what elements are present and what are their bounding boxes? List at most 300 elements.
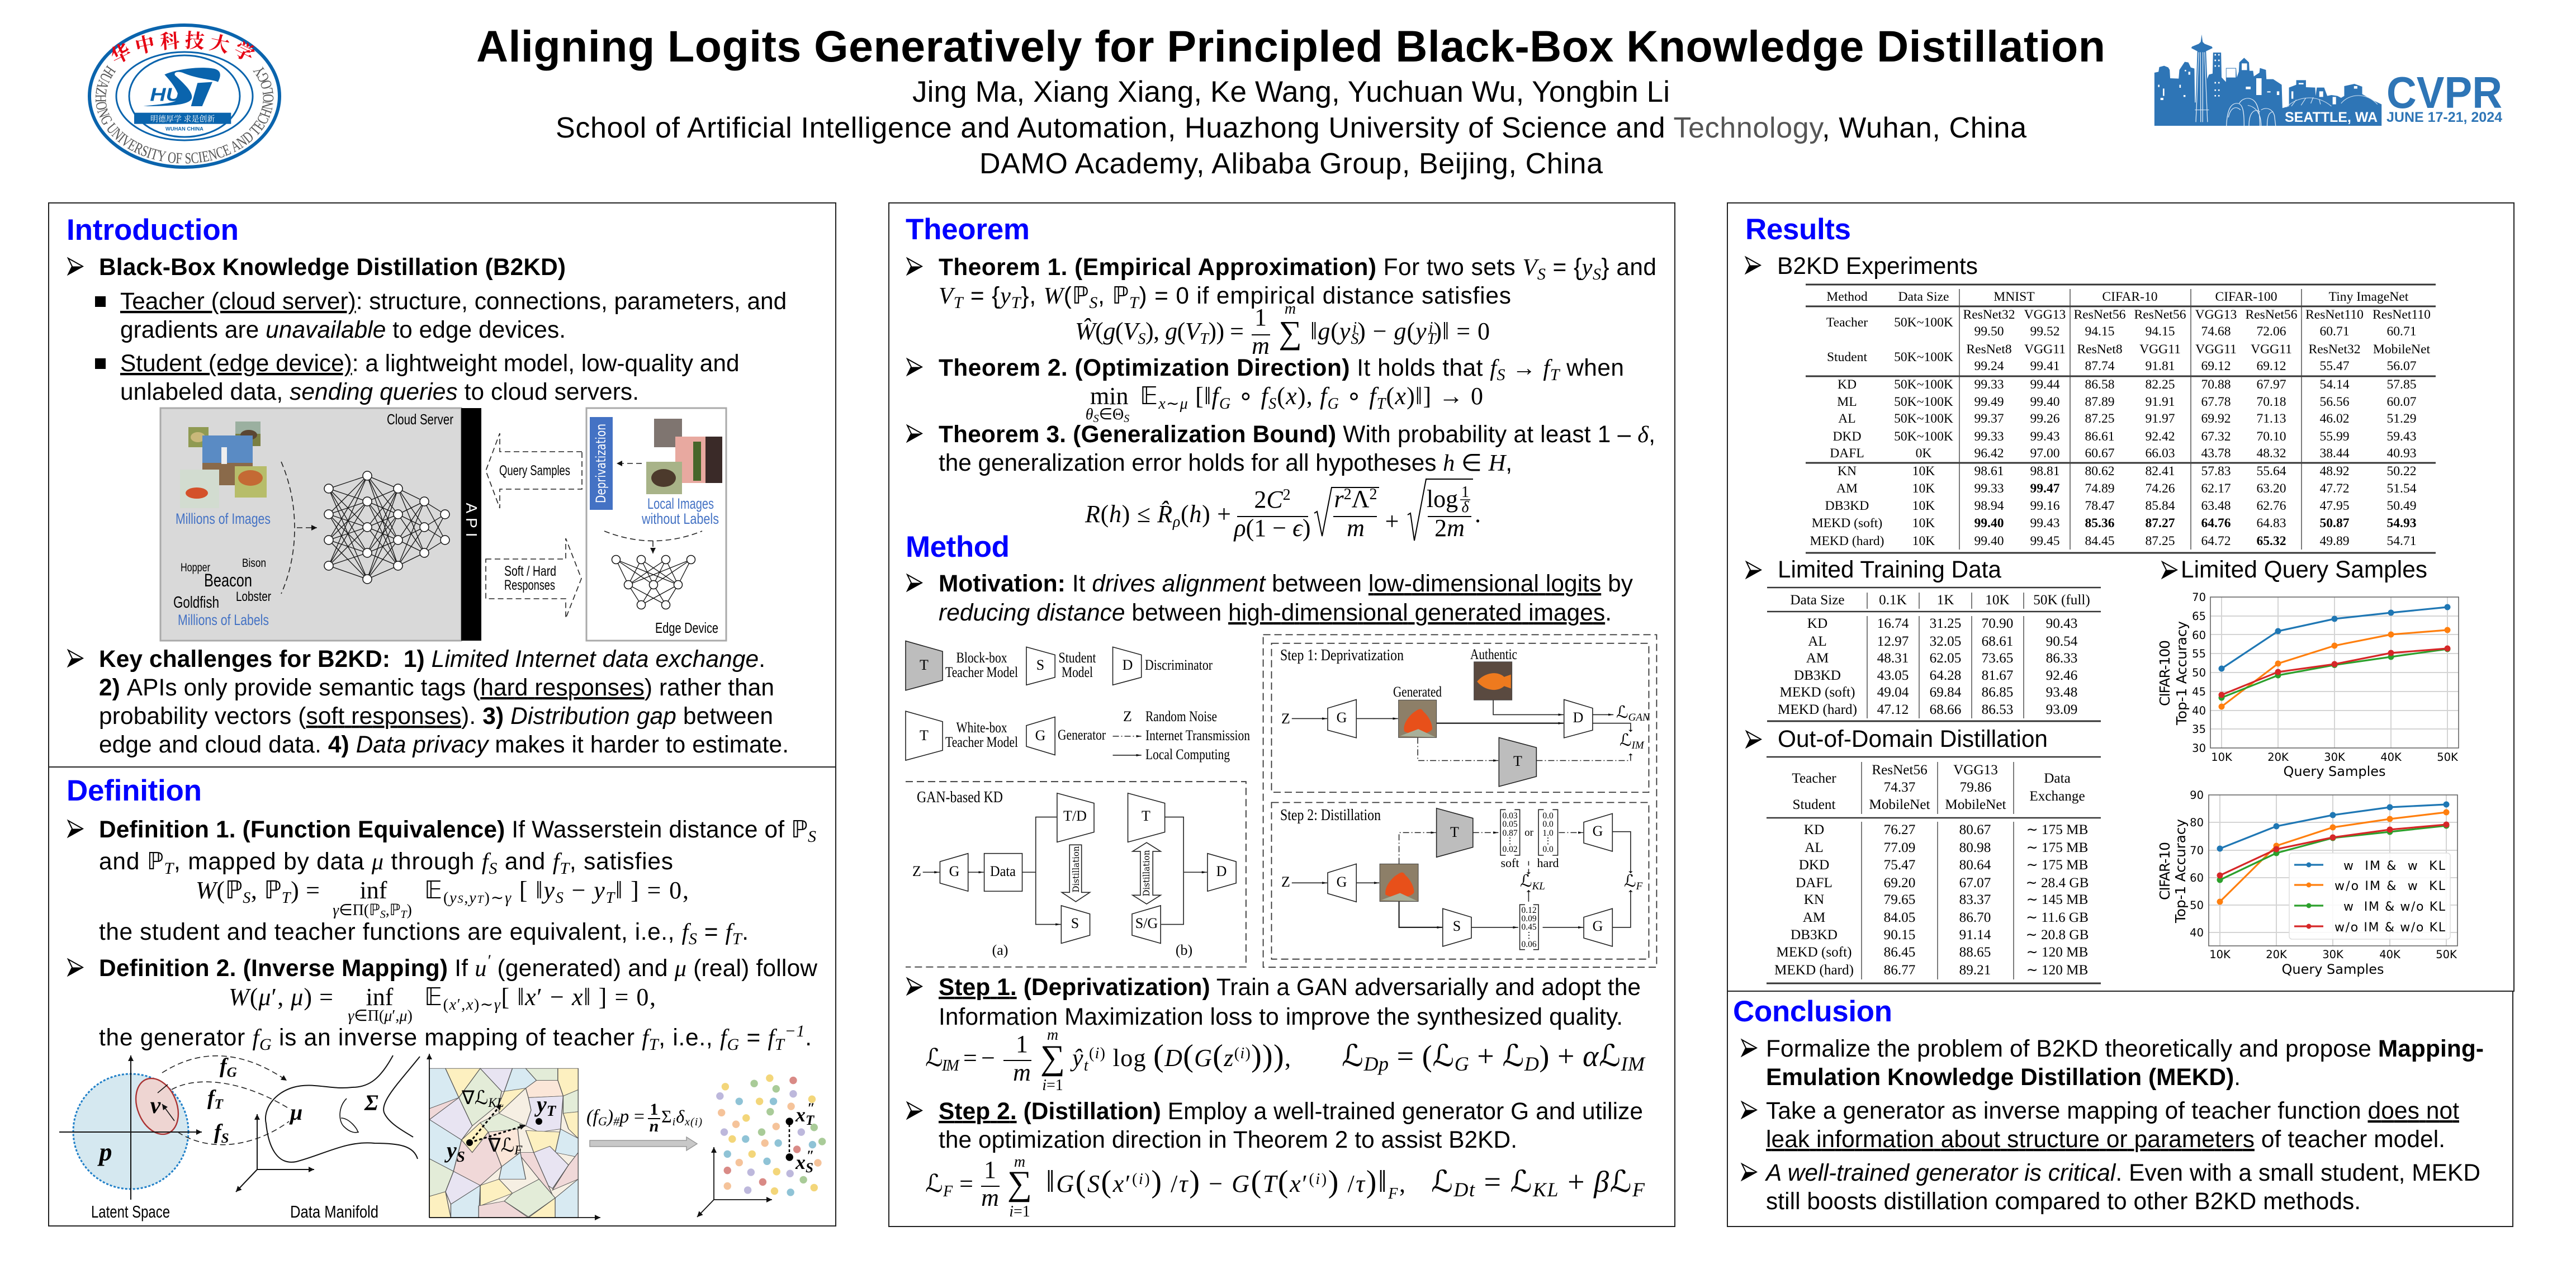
labels: GAN-based KD: Data <box>990 863 1016 879</box>
formula: optimization direction: f <box>1212 382 1222 410</box>
formula: empirical distance: )‖ = 0 <box>1433 318 1490 345</box>
mapping curves: T <box>215 1097 224 1112</box>
labels: step 2: soft <box>1500 856 1519 870</box>
line chart: CIFAR-10: 30K <box>2322 948 2344 961</box>
table: out-of-domain distillation: Teacher <box>1792 771 1836 786</box>
table: B2KD experiments: 80.62 <box>2085 464 2115 479</box>
labels: step 1: Step 1: Deprivatization <box>1280 646 1404 664</box>
formula: Wasserstein: inf <box>360 877 387 904</box>
scatter: generated distribution: ″ <box>807 1101 815 1116</box>
table: B2KD experiments: 74.89 <box>2085 481 2115 496</box>
word cloud: labels: Millions of Labels <box>178 612 269 628</box>
table: B2KD experiments: Tiny ImageNet <box>2329 290 2409 304</box>
labels: legend: Local Computing <box>1145 746 1230 763</box>
formula: distillation loss: ℒ <box>1431 1164 1453 1199</box>
text: student: Student (edge device) <box>120 350 352 376</box>
text: definition 1 conclusion: . <box>742 918 749 945</box>
formula: distillation loss: = <box>1476 1165 1509 1199</box>
latent space: p <box>97 1138 112 1166</box>
table: B2KD experiments: ResNet8 <box>1966 342 2012 357</box>
table: B2KD experiments: 67.32 <box>2201 429 2231 444</box>
text: definition 2: Definition 2. (Inverse Mapping) If u <box>99 955 486 982</box>
table: B2KD experiments: MEKD (hard) <box>1810 534 1884 548</box>
word cloud: labels: Bison <box>242 557 266 570</box>
table: out-of-domain distillation: VGG13 <box>1953 763 1998 778</box>
table: B2KD experiments: ResNet110 <box>2373 307 2431 322</box>
table: B2KD experiments: VGG11 <box>2251 342 2292 357</box>
neural network: teacher <box>324 471 449 584</box>
arrow: query samples <box>486 433 582 508</box>
labels: step 2: T <box>1450 824 1459 840</box>
labels: GAN-based KD: T/D <box>1063 808 1087 824</box>
formula: inverse mapping: (x′,x)∼γ <box>443 996 500 1014</box>
formula: F loss: /τ)‖ <box>1348 1164 1387 1199</box>
table: limited training data: 93.09 <box>2046 702 2077 717</box>
formula and arrow: pushforward: x(i) <box>684 1116 702 1128</box>
voronoi partition <box>429 1054 600 1218</box>
voronoi partition: KL <box>487 1096 504 1110</box>
table: B2KD experiments: 99.52 <box>2030 324 2060 339</box>
arrow: soft hard responses <box>486 538 581 618</box>
text: theorem 3: Theorem 3. (Generalization Bound) With probability at least 1 – δ, <box>939 421 1655 448</box>
label: cloud server: Cloud Server <box>387 411 453 428</box>
authors: Jing Ma, Xiang Xiang, Ke Wang, Yuchuan Wu, Yongbin Li <box>912 75 1670 108</box>
text: definition 1 line 2: and <box>498 848 552 874</box>
table: B2KD experiments: DKD <box>1832 429 1862 444</box>
table: out-of-domain distillation: ∼ 120 MB <box>2026 963 2088 978</box>
word cloud: labels: Beacon <box>204 570 252 590</box>
table: out-of-domain distillation: 80.64 <box>1959 858 1991 873</box>
labels: step 2: or <box>1524 827 1534 839</box>
table: B2KD experiments: ResNet110 <box>2305 307 2364 322</box>
table: B2KD experiments: 70.88 <box>2201 377 2231 392</box>
voronoi partition: F <box>514 1143 523 1157</box>
table: B2KD experiments: 82.25 <box>2145 377 2175 392</box>
table: limited training data: 68.61 <box>1982 634 2013 649</box>
formula: IM loss: m <box>1013 1059 1031 1086</box>
latent space: ν <box>150 1093 162 1119</box>
table: B2KD experiments: AL <box>1838 411 1856 426</box>
table: limited training data: 47.12 <box>1877 702 1909 717</box>
table: B2KD experiments: 56.07 <box>2386 359 2417 373</box>
mapping curves: S <box>221 1131 229 1146</box>
labels: step 2: G <box>1593 918 1603 934</box>
formula: IM loss: i=1 <box>1042 1077 1063 1094</box>
text: definition 1 conclusion: f <box>726 919 735 945</box>
formula: F loss: ℒ <box>925 1169 943 1198</box>
labels: step 2: ℒ <box>1624 872 1636 891</box>
table: B2KD experiments: 99.49 <box>1974 395 2004 409</box>
logo: CVPR 2024 Seattle: CVPR <box>2386 68 2502 117</box>
formula: deprivatization loss: ) + <box>1539 1039 1583 1073</box>
text: teacher: Teacher (cloud server) <box>120 288 356 314</box>
labels: GAN-based KD: T <box>1142 808 1150 824</box>
text: theorem 1 line 2: T <box>1011 293 1022 312</box>
icon: bullet arrow <box>907 425 922 442</box>
formula and arrow: pushforward: # <box>613 1114 620 1128</box>
table: B2KD experiments: 57.83 <box>2201 464 2231 479</box>
formula: Wasserstein: − <box>565 877 593 904</box>
labels: step 1 <box>1280 646 1650 769</box>
table: out-of-domain distillation: ∼ 145 MB <box>2026 892 2088 907</box>
icon: bullet arrow <box>2162 562 2177 578</box>
formula: distillation loss: + <box>1559 1165 1593 1199</box>
table: B2KD experiments: 86.58 <box>2085 377 2115 392</box>
labels: legend: Z <box>1123 708 1132 724</box>
formula: inverse mapping: inf <box>366 983 394 1011</box>
table: B2KD experiments: 74.26 <box>2145 481 2175 496</box>
arrow: query samples: Query Samples <box>499 463 570 479</box>
table: limited training data: 1K <box>1937 593 1954 608</box>
table: B2KD experiments: 82.41 <box>2145 464 2175 479</box>
text: definition 2: (generated) and <box>491 955 674 981</box>
line chart: CIFAR-100: Top-1 Accuracy <box>2174 621 2190 726</box>
text: key challenges line 2: 2) APIs only provide semantic tags (hard responses) rather than <box>99 674 774 700</box>
table: B2KD experiments: 60.67 <box>2085 446 2115 461</box>
labels: legend: Model <box>1062 664 1093 680</box>
bar: deprivatization <box>590 417 613 510</box>
table: B2KD experiments: 99.43 <box>2030 429 2060 444</box>
mapping curves: G <box>227 1065 237 1080</box>
table: limited training data: Data Size <box>1790 593 1845 608</box>
legend: w IM & w/o KL <box>2343 900 2446 914</box>
legend: w/o IM & w/o KL <box>2334 921 2446 935</box>
table: limited training data: MEKD (hard) <box>1778 702 1857 717</box>
labels: GAN-based KD <box>912 788 1227 958</box>
formula: empirical distance: m <box>1252 332 1270 359</box>
logo: CVPR 2024 Seattle: SEATTLE, WA <box>2285 110 2378 125</box>
table: out-of-domain distillation: ∼ 175 MB <box>2026 840 2088 855</box>
table: B2KD experiments: 99.50 <box>1974 324 2004 339</box>
table: B2KD experiments: 69.12 <box>2256 359 2286 373</box>
table: out-of-domain distillation: Exchange <box>2029 789 2085 804</box>
labels: legend: Discriminator <box>1145 657 1213 673</box>
labels: step 2: ⋮ <box>1524 931 1533 940</box>
formula: IM loss: t <box>1084 1057 1089 1074</box>
formula: generalization bound: + <box>1385 508 1399 535</box>
image collage: millions of images <box>180 422 267 508</box>
table: out-of-domain distillation: ∼ 120 MB <box>2026 945 2088 960</box>
scatter: generated distribution: x <box>795 1104 806 1126</box>
table: out-of-domain distillation: 80.98 <box>1959 840 1991 855</box>
labels: legend: Block-box <box>956 650 1007 666</box>
formula: deprivatization loss: D <box>1524 1053 1539 1075</box>
icon: bullet arrow <box>1746 731 1761 747</box>
labels: step 2: 0.12 <box>1521 906 1537 915</box>
table: B2KD experiments: 50K~100K <box>1894 315 1953 330</box>
panel: conclusion <box>1727 991 2513 1227</box>
table: B2KD experiments: 46.02 <box>2319 411 2350 426</box>
formula: IM loss: (i) <box>1234 1045 1251 1062</box>
table: B2KD experiments: 94.15 <box>2145 324 2175 339</box>
shapes: legend, GAN KD and steps <box>906 634 1656 967</box>
text: definition 2 conclusion: −1 <box>784 1022 804 1040</box>
logo: HUST university seal: WUHAN CHINA <box>165 126 203 131</box>
labels: step 2: 0.45 <box>1521 922 1537 932</box>
table: B2KD experiments: 99.40 <box>2030 395 2060 409</box>
line chart: CIFAR-10: 60 <box>2190 872 2204 884</box>
API bar <box>461 408 481 641</box>
table: out-of-domain distillation: MobileNet <box>1869 797 1930 812</box>
subheading: limited training data: Limited Training Data <box>1778 556 2001 583</box>
table: out-of-domain distillation: 76.27 <box>1884 822 1915 837</box>
table: B2KD experiments: ResNet56 <box>2245 307 2298 322</box>
formula and arrow: pushforward: n <box>650 1117 659 1135</box>
icon: bullet arrow <box>68 821 83 837</box>
data manifold <box>236 1055 420 1192</box>
formula: Wasserstein: ,ℙ <box>386 902 400 919</box>
formula: optimization direction: [‖ <box>1188 382 1211 410</box>
table: B2KD experiments: 40.93 <box>2386 446 2417 461</box>
text: conclusion 3 line 2: still boosts distillation compared to other B2KD methods. <box>1766 1188 2361 1214</box>
formula: F loss: 1 <box>984 1156 996 1183</box>
label: millions of images: Millions of Images <box>176 510 271 527</box>
table: B2KD experiments: 87.89 <box>2085 395 2115 409</box>
line chart: CIFAR-100 <box>2157 591 2459 779</box>
table: B2KD experiments: 70.10 <box>2256 429 2286 444</box>
panel: results <box>1727 203 2514 991</box>
table: B2KD experiments: 70.18 <box>2256 395 2286 409</box>
labels: step 2: ⋮ <box>1543 836 1552 846</box>
line chart: CIFAR-100: 50K <box>2437 751 2459 764</box>
table: B2KD experiments: 43.78 <box>2201 446 2231 461</box>
legend: w/o IM & w KL <box>2334 879 2446 893</box>
table: B2KD experiments: MEKD (soft) <box>1812 516 1882 531</box>
formula: optimization direction: S <box>1268 395 1276 413</box>
formula: F loss: /τ) − G(T(x′ <box>1171 1164 1308 1199</box>
table: B2KD experiments: MNIST <box>1993 290 2035 304</box>
text: step 2: Step 2. (Distillation) Employ a well-trained generator G and utilize <box>939 1098 1643 1124</box>
formula: IM loss: m <box>1047 1026 1058 1044</box>
line chart: CIFAR-10: Top-1 Accuracy <box>2172 819 2189 924</box>
labels: GAN-based KD: GAN-based KD <box>917 788 1003 806</box>
voronoi partition: ∇ℒ <box>488 1135 514 1156</box>
labels: step 2: 0.06 <box>1521 940 1537 949</box>
formula: distillation loss: ℒ <box>1510 1164 1532 1199</box>
formula: Wasserstein: ) = <box>291 877 320 904</box>
subheading: out-of-domain distillation: Out-of-Domain Distillation <box>1778 726 2048 752</box>
table: out-of-domain distillation: 67.07 <box>1959 875 1991 891</box>
table: B2KD experiments: 99.33 <box>1974 377 2004 392</box>
table: limited training data: 32.05 <box>1930 634 1961 649</box>
formula: IM loss: ))) <box>1251 1039 1284 1073</box>
formula: optimization direction: θ <box>1086 406 1093 423</box>
table: limited training data: 86.33 <box>2046 651 2077 666</box>
icon: bullet arrow <box>907 978 922 995</box>
table: limited training data: 43.05 <box>1877 668 1909 683</box>
table: limited training data: KD <box>1807 616 1827 631</box>
table: B2KD experiments: 54.93 <box>2386 516 2417 531</box>
table: B2KD experiments: 54.71 <box>2386 534 2417 548</box>
table: out-of-domain distillation: DAFL <box>1796 875 1832 891</box>
formula and arrow: pushforward: Σ <box>661 1106 672 1126</box>
line chart: CIFAR-10: 50K <box>2436 948 2457 961</box>
labels: step 2: Z <box>1281 874 1290 890</box>
text: definition 2 conclusion: G <box>259 1035 272 1054</box>
table: B2KD experiments: 72.06 <box>2256 324 2286 339</box>
table: B2KD experiments: VGG11 <box>2024 342 2066 357</box>
formula: deprivatization loss: = ( <box>1389 1039 1432 1073</box>
icon: bullet arrow <box>1742 1040 1756 1056</box>
formula: optimization direction: ∘ <box>1231 382 1260 410</box>
formula: deprivatization loss: αℒ <box>1583 1038 1621 1073</box>
text: theorem 1: S <box>1537 265 1546 283</box>
labels: step 2: 0.05 <box>1502 820 1518 829</box>
table: limited training data: 12.97 <box>1877 634 1909 649</box>
text: motivation line 2: reducing distance between high-dimensional generated images. <box>939 599 1612 626</box>
table: B2KD experiments: VGG13 <box>2024 307 2066 322</box>
formula: Wasserstein: , ℙ <box>251 877 281 904</box>
labels: legend: Random Noise <box>1145 708 1217 724</box>
text: definition 2 conclusion: the generator f <box>99 1024 259 1051</box>
labels: step 1: G <box>1337 709 1347 726</box>
table: B2KD experiments: VGG11 <box>2195 342 2237 357</box>
text: theorem 1 line 2: ℙ <box>1112 282 1129 309</box>
formula: generalization bound: R(h) ≤ R̂ <box>1085 500 1172 528</box>
logo: CVPR 2024 Seattle <box>2154 35 2502 126</box>
line chart: CIFAR-10: 40 <box>2190 926 2204 939</box>
table: B2KD experiments: 96.42 <box>1974 446 2004 461</box>
formula: optimization direction: ∈Θ <box>1099 406 1124 423</box>
text: definition 2 conclusion: f <box>768 1025 777 1051</box>
labels: step 2: G <box>1593 823 1603 839</box>
table: out-of-domain distillation: 90.15 <box>1884 927 1915 943</box>
word cloud: labels: Goldfish <box>173 594 219 612</box>
table: B2KD experiments: ResNet32 <box>2308 342 2361 357</box>
table: B2KD experiments: DAFL <box>1830 446 1864 461</box>
table: B2KD experiments: 50K~100K <box>1894 411 1953 426</box>
labels: step 1: IM <box>1631 740 1645 751</box>
text: definition 1: Definition 1. (Function Equivalence) If Wasserstein distance of ℙ <box>99 816 808 843</box>
labels: legend: Teacher Model <box>945 734 1018 750</box>
heading: method: Method <box>906 531 1010 564</box>
table: limited training data: 31.25 <box>1930 616 1961 631</box>
table: B2KD experiments: 49.89 <box>2319 534 2350 548</box>
heading: conclusion: Conclusion <box>1733 995 1892 1028</box>
labels: GAN-based KD: Distillation <box>1141 850 1152 897</box>
labels: step 2: F <box>1636 880 1643 892</box>
line chart: CIFAR-100: 40K <box>2380 751 2402 764</box>
formula: deprivatization loss: ℒ <box>1432 1038 1454 1073</box>
affiliation: DAMO: DAMO Academy, Alibaba Group, Beijing, China <box>979 148 1603 180</box>
text: theorem 1 line 2: y <box>998 283 1011 309</box>
table: B2KD experiments: 60.71 <box>2319 324 2350 339</box>
table: B2KD experiments: 50.49 <box>2386 499 2417 513</box>
text: theorem 1 line 2: ) = 0 if empirical distance satisfies <box>1139 282 1511 309</box>
formula: Wasserstein: S <box>556 889 564 907</box>
API bar: API <box>463 503 480 542</box>
text: theorem 2: f <box>1543 355 1552 381</box>
labels: GAN-based KD: S/G <box>1135 915 1158 931</box>
table: B2KD experiments: 62.17 <box>2201 481 2231 496</box>
line chart: CIFAR-100: 60 <box>2192 629 2206 642</box>
table: B2KD experiments: Method <box>1826 290 1868 304</box>
icon: bullet arrow <box>1746 562 1761 578</box>
icon: bullet arrow <box>907 1102 922 1119</box>
line chart: CIFAR-100: 65 <box>2192 610 2206 623</box>
table: limited training data: 69.84 <box>1930 685 1962 700</box>
formula: Wasserstein: T <box>606 889 616 907</box>
labels: GAN-based KD: Distillation <box>1071 846 1081 892</box>
table: limited training data: AL <box>1808 634 1827 649</box>
line chart: CIFAR-10: 90 <box>2190 789 2204 802</box>
formula: IM loss: log <box>1106 1044 1153 1072</box>
table: B2KD experiments: 10K <box>1912 499 1935 513</box>
formula: generalization bound: 2 <box>1370 486 1377 503</box>
formula: IM loss: 1 <box>1016 1030 1028 1058</box>
labels: step 2: ⋮ <box>1505 836 1514 846</box>
table: B2KD experiments: 48.92 <box>2319 464 2350 479</box>
table: B2KD experiments: 10K <box>1912 534 1935 548</box>
formula: Wasserstein: y <box>541 877 555 904</box>
table: out-of-domain distillation: Data <box>2044 771 2071 786</box>
table: B2KD experiments: 60.71 <box>2386 324 2417 339</box>
text: theorem 1 line 2: }, <box>1021 282 1043 309</box>
icon: square bullet student <box>95 358 106 369</box>
labels: legend: Generator <box>1058 727 1106 743</box>
formula: Wasserstein: γ∈Π(ℙ <box>333 902 380 919</box>
line chart: CIFAR-100: 50 <box>2192 666 2206 679</box>
heading: theorem: Theorem <box>906 213 1030 246</box>
formula: optimization direction: min <box>1090 382 1128 410</box>
labels: legend: Student <box>1059 650 1096 666</box>
table: out-of-domain distillation: KD <box>1804 822 1824 837</box>
labels: step 2: 0.0 <box>1542 820 1554 829</box>
text: conclusion 2: Take a generator as inverse mapping of teacher function does not <box>1766 1097 2459 1124</box>
formula: optimization direction: G <box>1328 395 1339 413</box>
formula: Wasserstein: y <box>591 877 605 904</box>
table: B2KD experiments: MobileNet <box>2373 342 2431 357</box>
formula: empirical distance: ‖g(y <box>1310 318 1350 345</box>
labels: step 2: S <box>1453 918 1461 934</box>
formula: F loss: F <box>1388 1185 1398 1202</box>
text: definition 1 conclusion: T <box>732 930 743 948</box>
formula: distillation loss: F <box>1632 1178 1645 1201</box>
neural network: student <box>612 556 695 609</box>
voronoi partition: T <box>547 1102 557 1119</box>
formula: empirical distance: T <box>1427 330 1437 348</box>
formula: IM loss: = − <box>958 1044 995 1072</box>
formula: distillation loss: Dt <box>1453 1178 1475 1201</box>
labels: step 2: 0.03 <box>1502 811 1518 821</box>
text: definition 2 conclusion: f <box>720 1025 730 1051</box>
formula: deprivatization loss: Dp <box>1363 1053 1389 1075</box>
table: out-of-domain distillation: 91.14 <box>1959 927 1991 943</box>
formula: IM loss <box>925 1026 1291 1094</box>
label: local images without labels: without Labels <box>641 510 719 527</box>
formula: Wasserstein: S <box>243 889 250 907</box>
table: B2KD experiments: 99.24 <box>1974 359 2004 373</box>
text: theorem 1 line 2: V <box>939 283 955 309</box>
line chart: CIFAR-100: 40 <box>2192 704 2206 717</box>
table: B2KD experiments: 99.47 <box>2030 481 2060 496</box>
formula: Wasserstein: 𝔼 <box>424 877 442 904</box>
word cloud: labels: Lobster <box>236 589 271 604</box>
voronoi partition: S <box>457 1148 465 1165</box>
text: theorem 1: Theorem 1. (Empirical Approximation) For two sets V <box>939 254 1537 281</box>
formula and arrow: pushforward: δ <box>676 1106 685 1126</box>
heading: introduction: Introduction <box>67 214 239 247</box>
text: theorem 2: S <box>1497 366 1505 384</box>
text: student: : a lightweight model, low-quality and <box>352 350 740 376</box>
table: B2KD experiments: ResNet56 <box>2134 307 2186 322</box>
formula: empirical distance: 1 <box>1254 304 1267 331</box>
labels: step 1: ℒ <box>1616 703 1628 722</box>
table: B2KD experiments: 50K~100K <box>1894 350 1953 364</box>
table: B2KD experiments: 60.07 <box>2386 395 2417 409</box>
formula: inverse mapping <box>229 983 656 1025</box>
line chart: CIFAR-100: 30K <box>2324 751 2346 764</box>
